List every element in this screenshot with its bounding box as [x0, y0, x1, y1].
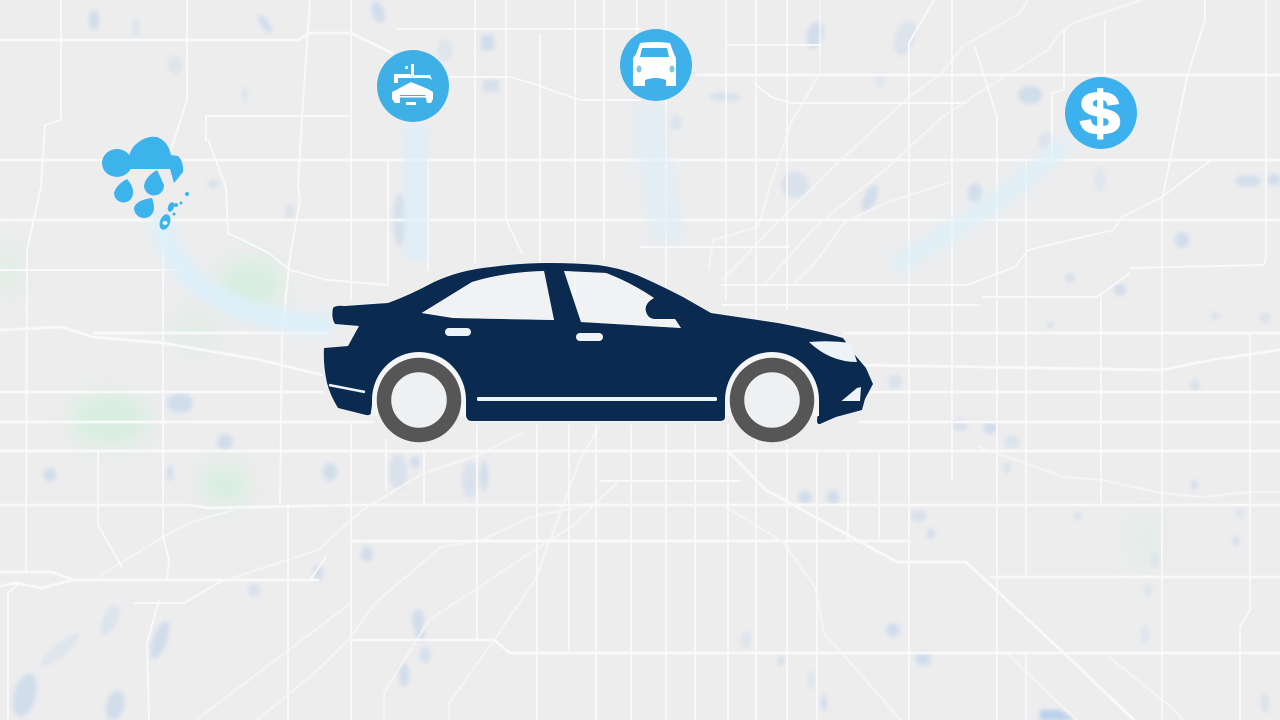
light-blue connector: car wash icon to car [404, 125, 428, 260]
door handles [445, 328, 603, 341]
light-blue connector: dollar icon to car [893, 143, 1066, 267]
headlight [809, 341, 857, 362]
car rear window [422, 271, 554, 320]
rear wheel [384, 365, 454, 435]
car front window [564, 271, 681, 328]
icon: car wash badge [377, 50, 449, 122]
wheel arches [375, 355, 816, 416]
fog light [842, 387, 861, 401]
icon: rain cloud [102, 137, 189, 231]
icon: rain cloud bubbles [158, 192, 189, 231]
light-blue connector: car icon to car [650, 105, 668, 240]
front wheel [737, 365, 807, 435]
light-blue connector: rain icon to car [162, 225, 325, 325]
map green areas [0, 245, 1163, 570]
car body [324, 263, 873, 424]
rear reflector [329, 385, 365, 392]
icon: car front badge [620, 29, 692, 101]
icon: dollar badge [1065, 77, 1137, 149]
side trim [477, 397, 717, 401]
icon: dollar badge: $ [1080, 81, 1120, 148]
car illustration [324, 263, 873, 435]
